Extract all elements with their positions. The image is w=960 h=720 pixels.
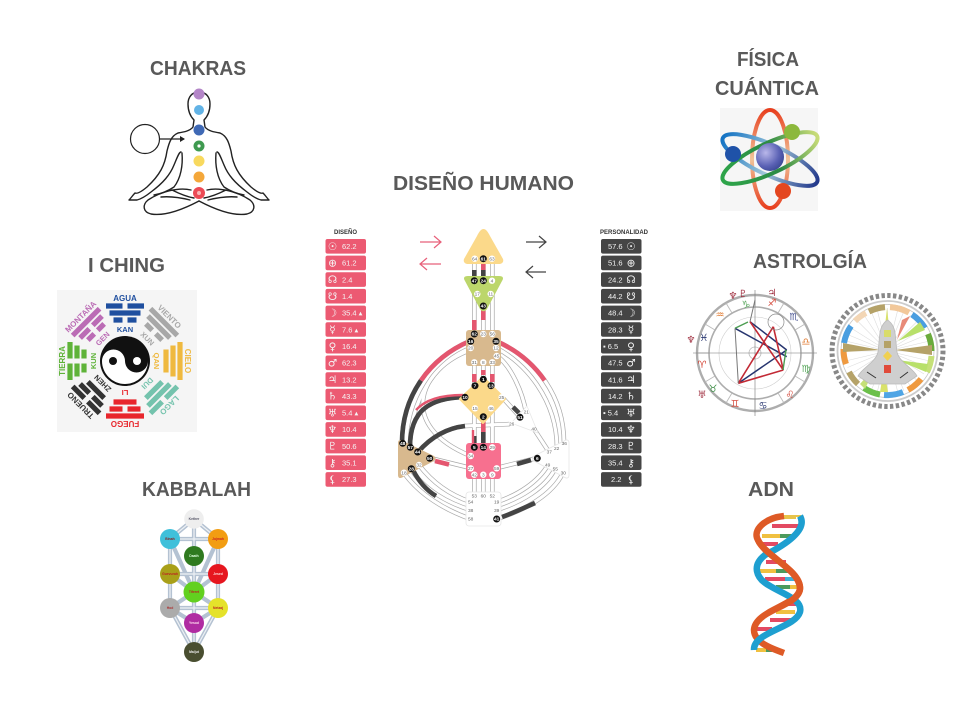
icon: atom — [717, 108, 823, 211]
panel: diseño planetary column: 43.3 — [342, 392, 357, 401]
icon: kabbalah tree of life: Guevurah — [162, 572, 178, 576]
icon: natal chart wheel: ♒ — [716, 310, 725, 321]
panel: diseño planetary column: ⊕ — [328, 258, 337, 270]
gates: 58 — [468, 517, 474, 523]
arrow: personality left — [526, 266, 546, 278]
trigram: trueno — [64, 367, 119, 422]
icon: kabbalah tree of life — [160, 509, 228, 662]
trigram: tierra — [58, 342, 98, 380]
panel: personalidad planetary column: ☉ — [626, 241, 636, 253]
panel: diseño planetary column: 62.2 — [342, 242, 357, 251]
panel: personalidad planetary column: 51.6 — [608, 259, 623, 268]
gates: 42 — [472, 472, 477, 478]
center: solar plexus — [532, 440, 569, 478]
center: spleen — [398, 440, 436, 478]
icon: kabbalah tree of life: Kether — [189, 517, 200, 521]
gates: 55 — [553, 467, 558, 473]
channels — [402, 260, 564, 519]
gates: 56 — [490, 332, 495, 338]
panel: diseño planetary column — [326, 229, 366, 487]
gates: 11 — [488, 292, 494, 298]
gates: 15 — [472, 406, 478, 412]
gates: 22 — [554, 446, 560, 452]
gates: 29 — [490, 445, 495, 451]
arrow: design left — [420, 258, 441, 270]
icon: natal chart wheel: ♏ — [790, 312, 799, 323]
panel: personalidad planetary column: ♂ — [626, 357, 636, 369]
panel: personalidad planetary column: ☋ — [626, 291, 636, 303]
gates: 57 — [408, 445, 413, 451]
icon: natal chart wheel: ♈ — [698, 360, 707, 371]
gates: 20 — [468, 346, 474, 352]
panel: diseño planetary column: 35.4 ▴ — [342, 309, 363, 318]
gates: 19 — [494, 500, 500, 506]
center: root — [466, 492, 501, 526]
gates: 17 — [475, 292, 480, 298]
icon: yin yang — [100, 336, 150, 386]
icon: kabbalah tree of life: Jesed — [213, 572, 223, 576]
panel: personalidad planetary column: ♃ — [626, 374, 636, 386]
activated segments — [402, 262, 545, 517]
icon: natal chart wheel: ♇ — [739, 289, 747, 300]
gates: 49 — [545, 462, 551, 468]
panel: diseño planetary column: 2.4 — [342, 275, 352, 284]
gates: 16 — [468, 339, 474, 345]
panel: diseño planetary column: 7.6 ▴ — [342, 325, 359, 334]
panel: personalidad planetary column: 44.2 — [608, 292, 623, 301]
gates: 28 — [409, 466, 414, 472]
gates: 7 — [474, 383, 477, 389]
title: chakras: CHAKRAS — [150, 58, 246, 80]
panel: personalidad planetary column: 57.6 — [608, 242, 623, 251]
gates: 3 — [482, 472, 485, 478]
title: kabbalah: KABBALAH — [142, 479, 251, 501]
panel: diseño planetary column: ♂ — [328, 357, 337, 369]
panel: personalidad planetary column: ♆ — [626, 424, 636, 436]
title: física cuántica: FÍSICA — [737, 48, 799, 71]
panel: personalidad planetary column: ♀ — [627, 341, 635, 353]
title: i ching: I CHING — [88, 255, 165, 277]
gates: 60 — [481, 493, 486, 499]
panel: personalidad planetary column: 48.4 — [608, 309, 623, 318]
panel: diseño planetary column: 61.2 — [342, 259, 357, 268]
trigram: lago: DUI — [140, 376, 155, 391]
panel: personalidad planetary column: 35.4 — [608, 458, 623, 468]
icon: natal chart wheel: ♑ — [742, 300, 750, 311]
panel: personalidad planetary column — [600, 230, 649, 487]
trigram: agua — [106, 294, 144, 334]
gates — [399, 255, 567, 523]
gates: 34 — [468, 454, 474, 460]
gates: 5 — [473, 445, 476, 451]
icon: natal chart wheel: ♓ — [700, 333, 708, 344]
gates: 21 — [524, 409, 529, 415]
panel: personalidad planetary column: ☿ — [628, 324, 634, 336]
gates: 4 — [491, 278, 494, 284]
gates: 10 — [462, 395, 468, 401]
gates: 33 — [490, 360, 495, 366]
gates: 37 — [547, 449, 552, 455]
panel: personalidad planetary column: ♅ — [626, 407, 636, 419]
panel: diseño planetary column: ♅ — [328, 407, 337, 419]
gates: 54 — [468, 500, 474, 506]
panel: diseño planetary column: ♇ — [328, 441, 337, 453]
arrow: personality right — [526, 236, 546, 248]
panel: diseño planetary column: ⚸ — [329, 474, 336, 486]
gates: 32 — [416, 463, 422, 469]
panel: personalidad planetary column: ⚸ — [627, 474, 635, 486]
trigram: montaña: MONTAÑA — [63, 299, 98, 334]
panel: diseño planetary column: ☉ — [328, 241, 337, 253]
trigram: montaña: GEN — [94, 330, 112, 348]
panel: diseño planetary column: 10.4 — [342, 425, 357, 434]
gates: 59 — [494, 466, 500, 472]
title: astrología: ASTROLGÍA — [753, 250, 867, 273]
heading: diseño: DISEÑO — [334, 229, 357, 236]
icon: kabbalah tree of life: Daath — [189, 554, 199, 558]
panel: personalidad planetary column: 47.5 — [608, 359, 623, 368]
gates: 43 — [481, 304, 486, 310]
trigram: lago — [131, 367, 186, 422]
panel: personalidad planetary column: ▪ 5.4 — [603, 409, 618, 418]
panel: personalidad planetary column: 24.2 — [608, 275, 623, 284]
icon: kabbalah tree of life: Jojmah — [212, 537, 224, 541]
gates: 23 — [481, 332, 486, 338]
icon: natal chart wheel: ♅ — [698, 390, 706, 401]
icon: meditating figure with chakras — [129, 88, 269, 214]
gates: 14 — [481, 445, 486, 451]
icon: kabbalah tree of life: Netzaj — [213, 606, 223, 610]
panel: personalidad planetary column: ⚷ — [627, 457, 635, 469]
icon: kabbalah tree of life: Binah — [165, 537, 175, 541]
panel: diseño planetary column: 5.4 ▴ — [342, 409, 359, 418]
gates: 45 — [494, 354, 500, 360]
panel: personalidad planetary column: ♄ — [626, 391, 636, 403]
icon: i ching bagua — [57, 290, 197, 432]
icon: natal chart wheel — [687, 288, 817, 416]
gates: 35 — [493, 339, 499, 345]
trigram: tierra: TIERRA — [58, 346, 67, 376]
icon: kabbalah tree of life: Yesod — [189, 621, 199, 625]
gates: 62 — [472, 332, 477, 338]
gates: 1 — [482, 377, 485, 383]
panel: diseño planetary column: 16.4 — [342, 342, 357, 351]
trigram: viento: VIENTO — [156, 303, 183, 330]
gates: 2 — [482, 414, 485, 420]
icon: natal chart wheel: ♉ — [709, 384, 718, 395]
gates: 26 — [509, 421, 515, 427]
panel: diseño planetary column: ☊ — [328, 274, 337, 286]
icon: human design mandala wheel — [832, 296, 943, 406]
gates: 27 — [468, 466, 474, 472]
gates: 6 — [536, 456, 539, 462]
gates: 9 — [491, 472, 494, 478]
icon: natal chart wheel: ♆ — [729, 291, 737, 302]
heading: personalidad: PERSONALIDAD — [600, 230, 649, 236]
title: diseño humano: DISEÑO HUMANO — [393, 172, 574, 195]
title: física cuántica — [715, 48, 819, 100]
panel: diseño planetary column: ♀ — [329, 341, 336, 353]
trigram: fuego: LI — [122, 388, 128, 397]
gates: 40 — [531, 427, 537, 433]
gates: 53 — [472, 493, 477, 499]
gates: 52 — [490, 493, 495, 499]
trigram: tierra: KUN — [89, 353, 98, 369]
gates: 36 — [562, 441, 567, 447]
gates: 12 — [493, 346, 499, 352]
panel: diseño planetary column: ☋ — [328, 291, 337, 303]
icon: natal chart wheel: ♐ — [768, 298, 776, 309]
center: ajna — [464, 276, 503, 311]
icon: kabbalah tree of life: Maljut — [189, 650, 200, 654]
panel: personalidad planetary column: 10.4 — [608, 425, 623, 434]
gates: 31 — [472, 360, 477, 366]
trigram: agua: AGUA — [113, 294, 137, 303]
gates: 48 — [400, 441, 406, 447]
center: sacral — [466, 443, 501, 479]
trigram: montaña — [63, 299, 120, 356]
gates: 46 — [488, 406, 494, 412]
panel: personalidad planetary column: 28.3 — [608, 442, 623, 451]
gates: 47 — [472, 278, 477, 284]
trigram: fuego — [106, 388, 144, 428]
gates: 18 — [401, 470, 407, 476]
trigram: trueno: TRUENO — [66, 390, 96, 420]
gates: 25 — [499, 395, 505, 401]
panel: diseño planetary column: 62.3 — [342, 359, 357, 368]
panel: diseño planetary column: 27.3 — [342, 475, 357, 484]
title: física cuántica: CUÁNTICA — [715, 77, 819, 100]
center: g — [460, 377, 505, 423]
icon: natal chart wheel: ♊ — [731, 399, 740, 410]
trigram: viento — [131, 300, 186, 355]
panel: diseño planetary column: 13.2 — [342, 375, 357, 384]
panel: personalidad planetary column: ☊ — [626, 274, 636, 286]
gates: 39 — [494, 508, 500, 514]
panel: personalidad planetary column: 28.3 — [608, 325, 623, 334]
title: adn: ADN — [748, 479, 794, 501]
icon: natal chart wheel: ♎ — [802, 337, 811, 348]
trigram: cielo: CIELO — [183, 349, 192, 373]
panel: personalidad planetary column: 41.6 — [608, 375, 623, 384]
gates: 51 — [517, 415, 523, 421]
panel: personalidad planetary column: ♇ — [626, 441, 636, 453]
icon: natal chart wheel: ♆ — [687, 335, 695, 346]
panel: personalidad planetary column: ☽ — [626, 308, 636, 320]
trigram: cielo — [152, 342, 192, 380]
icon: natal chart wheel: ♌ — [786, 390, 794, 401]
panel: personalidad planetary column: ⊕ — [627, 258, 635, 270]
gates: 50 — [427, 456, 433, 462]
chart: human design bodygraph — [398, 229, 569, 526]
gates: 38 — [468, 508, 474, 514]
panel: diseño planetary column: 50.6 — [342, 442, 357, 451]
trigram: cielo: QAN — [152, 353, 161, 369]
trigram: fuego: FUEGO — [111, 419, 139, 428]
gates: 63 — [489, 256, 495, 262]
trigram: agua: KAN — [117, 325, 133, 334]
icon: natal chart wheel: ♃ — [768, 288, 776, 299]
icon: natal chart wheel: ♋ — [759, 401, 767, 412]
panel: personalidad planetary column: ▪ 6.5 — [603, 342, 618, 351]
center: head — [464, 229, 503, 264]
icon: dna double helix — [754, 516, 802, 653]
panel: personalidad planetary column: 14.2 — [608, 392, 623, 401]
icon: kabbalah tree of life: Hod — [167, 606, 173, 610]
icon: natal chart wheel: ♍ — [802, 364, 811, 375]
gates: 64 — [472, 256, 478, 262]
panel: diseño planetary column: ☽ — [328, 308, 337, 320]
panel: diseño planetary column: 1.4 — [342, 292, 352, 301]
panel: diseño planetary column: ♃ — [328, 374, 337, 386]
panel: personalidad planetary column: 2.2 — [611, 475, 621, 484]
gates: 24 — [481, 278, 486, 284]
panel: diseño planetary column: ☿ — [329, 324, 336, 336]
gates: 8 — [482, 360, 485, 366]
gates: 44 — [415, 450, 421, 456]
center: throat — [466, 330, 501, 366]
trigram: lago: LAGO — [158, 394, 181, 417]
gates: 61 — [481, 256, 486, 262]
gates: 41 — [494, 517, 500, 523]
trigram: trueno: ZHEN — [92, 373, 113, 394]
panel: diseño planetary column: 35.1 — [342, 458, 357, 468]
panel: diseño planetary column: ⚷ — [329, 457, 336, 469]
panel: diseño planetary column: ♄ — [328, 391, 337, 403]
center: heart — [511, 406, 538, 433]
gates: 30 — [561, 470, 566, 476]
trigram: viento: XUN — [138, 330, 156, 348]
gates: 13 — [488, 383, 494, 389]
arrow: design right — [420, 236, 441, 248]
panel: diseño planetary column: ♆ — [328, 424, 337, 436]
icon: kabbalah tree of life: Tiferet — [189, 590, 200, 594]
